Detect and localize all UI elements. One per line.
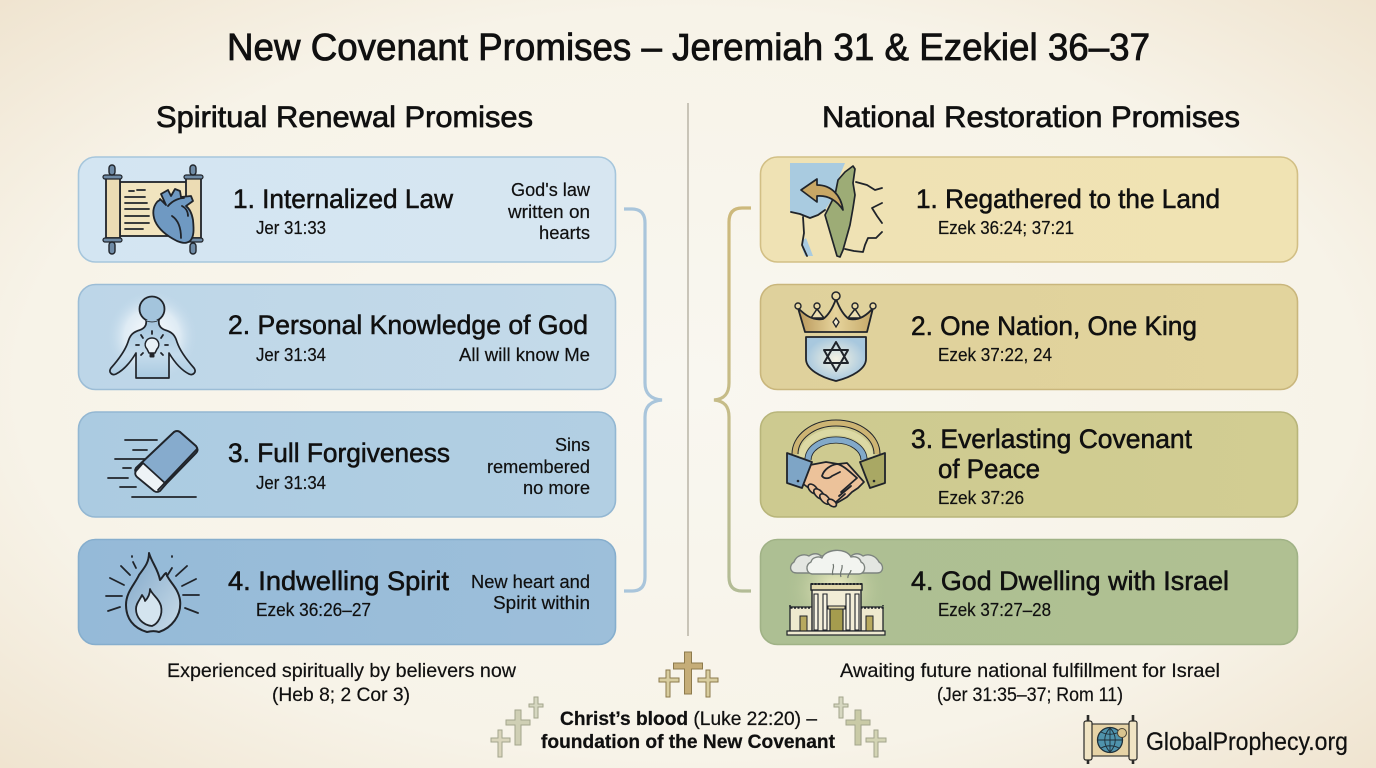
caption: national: (Jer 31:35–37; Rom 11) xyxy=(937,684,1123,706)
icon: map with arrow xyxy=(790,163,882,257)
caption: spiritual xyxy=(167,660,517,706)
panel: national restoration card 2 xyxy=(760,284,1298,390)
card text xyxy=(233,179,591,243)
foundation text: Christ’s blood (Luke 22:20) – xyxy=(560,708,817,730)
caption: national: Awaiting future national fulfillment for Israel xyxy=(840,660,1220,682)
icon: person with lightbulb xyxy=(106,290,198,382)
card text xyxy=(228,566,590,620)
icon: logo scroll and globe xyxy=(1084,715,1137,764)
title: New Covenant Promises – Jeremiah 31 & Ezekiel 36–37 xyxy=(227,27,1150,69)
card text: New heart and xyxy=(471,571,590,592)
panel: national restoration card 3 xyxy=(760,412,1298,517)
icon: eraser xyxy=(108,431,198,497)
icon: rainbow handshake xyxy=(787,423,885,508)
card text xyxy=(911,424,1192,508)
caption: spiritual: Experienced spiritually by believers now xyxy=(167,660,517,682)
brace: right column xyxy=(714,208,751,591)
card text: Sins xyxy=(555,434,590,455)
card text: God's law xyxy=(511,179,591,200)
caption: national xyxy=(840,660,1220,706)
icon: right crosses xyxy=(834,697,886,757)
card text: of Peace xyxy=(938,454,1040,484)
card text: 4. Indwelling Spirit xyxy=(228,566,449,596)
caption: spiritual: (Heb 8; 2 Cor 3) xyxy=(272,684,410,706)
card text: 1. Regathered to the Land xyxy=(916,184,1220,214)
panel: national restoration card 4 xyxy=(760,540,1298,644)
card text: hearts xyxy=(539,222,590,243)
icon: scroll and heart xyxy=(103,165,203,254)
card text: 2. Personal Knowledge of God xyxy=(228,310,588,340)
card text: written on xyxy=(507,201,590,222)
card text xyxy=(911,311,1197,365)
heading: national restoration: National Restoration Promises xyxy=(822,101,1240,134)
card text xyxy=(228,310,590,365)
panel: spiritual renewal card 3 xyxy=(78,412,616,517)
foundation text xyxy=(541,708,835,753)
card text: 4. God Dwelling with Israel xyxy=(911,566,1229,596)
card text: Ezek 36:26–27 xyxy=(256,600,371,620)
logo xyxy=(1084,715,1348,764)
card text: Spirit within xyxy=(493,592,590,613)
icon: center crosses xyxy=(659,652,718,697)
card text: Ezek 37:27–28 xyxy=(938,600,1051,620)
card text: Ezek 37:22, 24 xyxy=(938,345,1052,365)
card text: Ezek 36:24; 37:21 xyxy=(938,218,1074,238)
card text: Jer 31:33 xyxy=(256,218,326,238)
card text: Jer 31:34 xyxy=(256,473,326,493)
card text: 3. Full Forgiveness xyxy=(228,438,450,468)
icon: left crosses xyxy=(491,697,543,757)
card text: 2. One Nation, One King xyxy=(911,311,1197,341)
card text: Ezek 37:26 xyxy=(938,488,1024,508)
card text xyxy=(911,566,1229,620)
panel: spiritual renewal card 4 xyxy=(78,540,616,644)
card text xyxy=(916,184,1220,238)
foundation text: foundation of the New Covenant xyxy=(541,731,835,753)
heading: spiritual renewal: Spiritual Renewal Promises xyxy=(156,101,533,134)
panel: spiritual renewal card 2 xyxy=(78,284,616,390)
icon: temple with cloud xyxy=(786,544,886,636)
logo: GlobalProphecy.org xyxy=(1146,728,1348,756)
card text: 3. Everlasting Covenant xyxy=(911,424,1192,454)
panel: spiritual renewal card 1 xyxy=(78,157,616,262)
brace: left column xyxy=(624,209,662,591)
card text xyxy=(228,434,590,498)
card text: All will know Me xyxy=(459,344,590,365)
card text: Jer 31:34 xyxy=(256,345,326,365)
icon: flame xyxy=(106,553,199,632)
card text: remembered xyxy=(487,456,590,477)
icon: crown and shield xyxy=(795,292,876,381)
card text: no more xyxy=(523,477,590,498)
card text: 1. Internalized Law xyxy=(233,184,453,214)
panel: national restoration card 1 xyxy=(760,157,1298,262)
